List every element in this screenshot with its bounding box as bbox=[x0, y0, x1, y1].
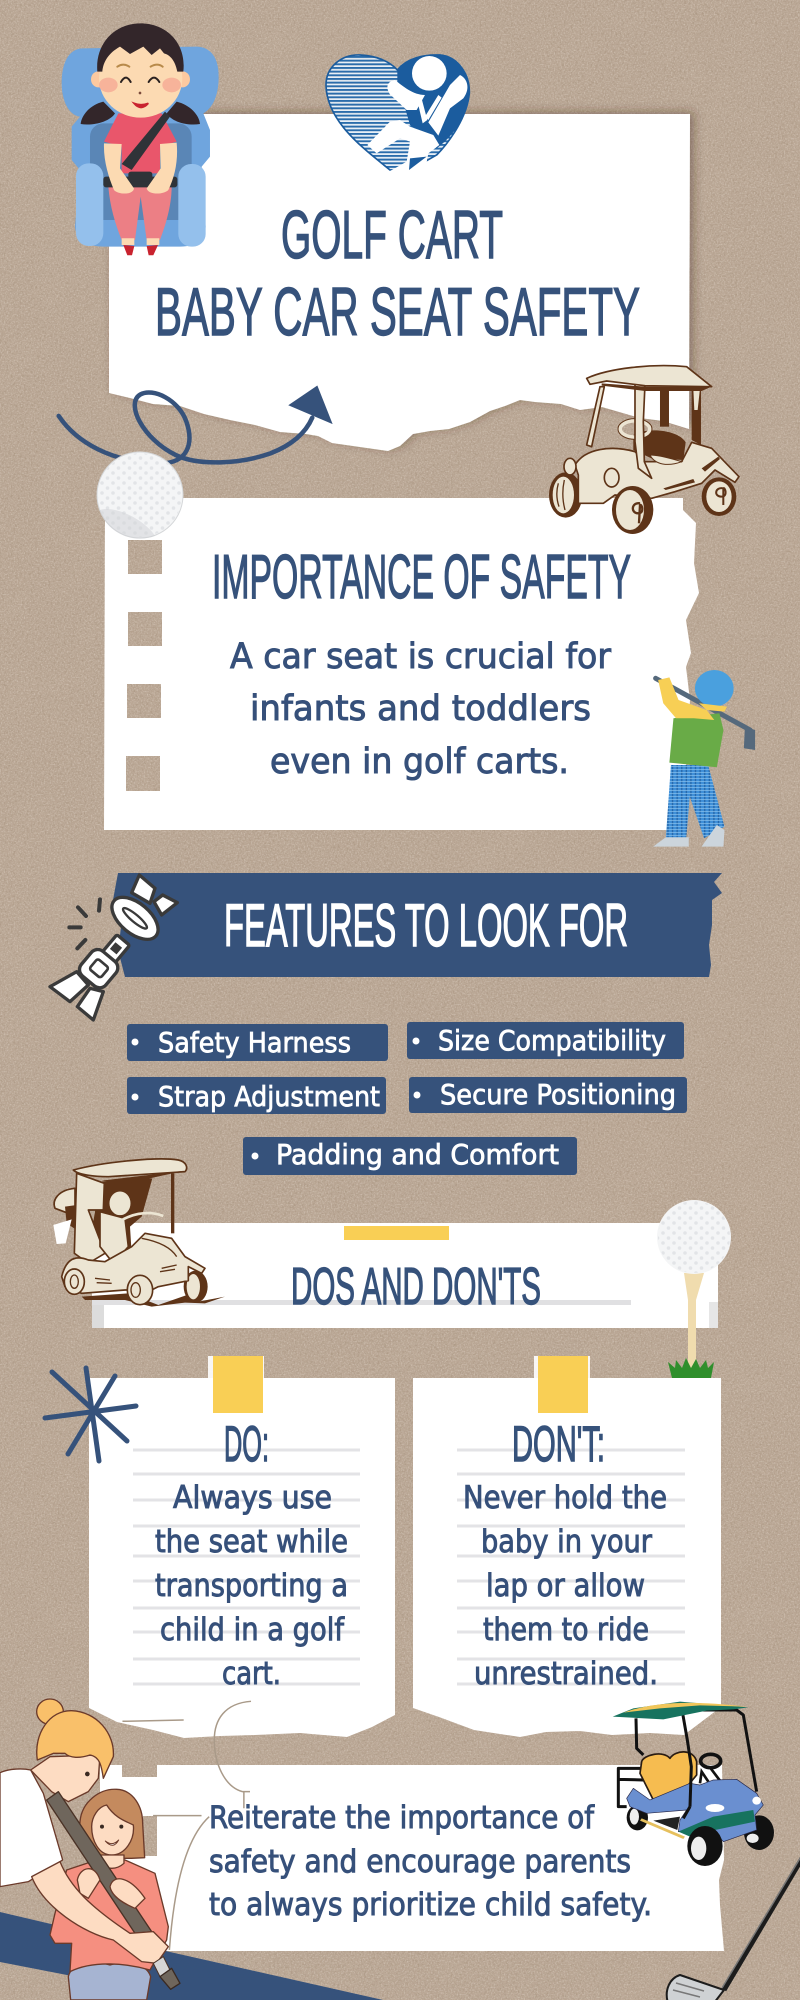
buckle bbox=[153, 1957, 170, 1977]
roof bbox=[613, 1702, 748, 1719]
white bow bbox=[53, 1219, 72, 1244]
arms bbox=[658, 677, 714, 720]
tape bbox=[534, 1356, 590, 1414]
panel: do note: child in a golf bbox=[160, 1612, 345, 1648]
panel: do note: cart. bbox=[222, 1656, 281, 1692]
panel: do note: the seat while bbox=[155, 1524, 348, 1560]
panel: dos and don'ts header paper bbox=[92, 1223, 718, 1328]
rear bag bbox=[54, 1188, 75, 1213]
text block: closing message: Reiterate the importance of bbox=[209, 1800, 595, 1836]
grass bbox=[668, 1358, 714, 1378]
icon: blue golf cart bbox=[613, 1702, 774, 1866]
heading: don't: DON'T: bbox=[512, 1416, 605, 1472]
head bbox=[91, 71, 106, 87]
ball bbox=[657, 1200, 731, 1274]
icon: vintage golf cart bbox=[549, 366, 739, 534]
panel: importance of safety paper bbox=[104, 498, 699, 830]
hair bbox=[97, 23, 184, 72]
title line 1: GOLF CART bbox=[281, 197, 503, 273]
icon: vintage cart with child bbox=[53, 1159, 225, 1307]
rear rack bbox=[618, 1768, 643, 1807]
chip: size compatibility: Size Compatibility bbox=[438, 1024, 666, 1057]
bun bbox=[37, 1699, 63, 1724]
ruled lines bbox=[457, 1450, 685, 1684]
green stripe bbox=[678, 1810, 755, 1837]
icon: looped arrow bbox=[59, 386, 333, 463]
steering wheel bbox=[701, 1754, 721, 1768]
icon: golf club bbox=[667, 1855, 800, 2000]
child neck bbox=[101, 1855, 124, 1868]
tee bbox=[684, 1273, 704, 1368]
rear post bbox=[171, 1173, 174, 1233]
text: do body: Always use bbox=[173, 1480, 332, 1516]
panel: don't note bbox=[413, 1356, 721, 1737]
child hands bbox=[77, 1869, 145, 1908]
roof bbox=[602, 383, 712, 391]
heading: dos and don'ts: DOS AND DON'TS bbox=[291, 1258, 541, 1316]
navy ground shape bbox=[0, 1912, 383, 2000]
front wheel bbox=[687, 1826, 723, 1866]
icon: seatbelt heart bbox=[326, 55, 469, 171]
cap bbox=[695, 670, 734, 707]
under dark bbox=[653, 1817, 680, 1830]
text block: importance body: even in golf carts. bbox=[270, 742, 569, 782]
club bbox=[656, 678, 750, 730]
woman shirt bbox=[0, 1769, 63, 1887]
illustration: parent buckling child bbox=[0, 1699, 180, 2000]
left post bbox=[587, 387, 604, 447]
chip: strap adjustment: Strap Adjustment bbox=[158, 1080, 380, 1113]
woman hair bbox=[37, 1711, 113, 1778]
icon: golfer bbox=[653, 670, 755, 847]
face bbox=[121, 78, 159, 82]
wheels bbox=[64, 1269, 84, 1294]
child face bbox=[92, 1805, 134, 1855]
icon: asterisk doodle bbox=[45, 1368, 136, 1461]
shirt bbox=[669, 713, 723, 767]
icon: seatbelt buckle bbox=[50, 875, 177, 1020]
rear posts bbox=[660, 388, 669, 427]
body bbox=[62, 1233, 205, 1293]
centre post bbox=[635, 384, 652, 478]
text block: importance body bbox=[230, 637, 612, 782]
text block: closing message: to always prioritize child safety. bbox=[209, 1887, 652, 1923]
woman arm bbox=[32, 1862, 168, 1963]
belt lap bbox=[103, 177, 177, 187]
panel: don't note: baby in your bbox=[481, 1524, 652, 1560]
pillar bbox=[74, 1173, 105, 1263]
chip: padding and comfort: Padding and Comfort bbox=[276, 1138, 559, 1171]
text block: closing message: safety and encourage parents bbox=[209, 1844, 631, 1880]
child hair bbox=[80, 1789, 145, 1858]
seat bbox=[633, 430, 686, 460]
body bbox=[627, 1779, 763, 1842]
frame bbox=[683, 1710, 757, 1818]
arms bbox=[104, 143, 177, 194]
roof bbox=[73, 1159, 187, 1177]
heading: do: DO: bbox=[224, 1416, 269, 1472]
woman face bbox=[31, 1755, 100, 1802]
panel: don't note: them to ride bbox=[483, 1612, 649, 1648]
tape bbox=[344, 1226, 449, 1240]
left wheel bbox=[549, 472, 582, 518]
rail bbox=[640, 1818, 685, 1839]
cabin bbox=[88, 1178, 152, 1253]
thin curved sketch lines bbox=[122, 1701, 251, 1950]
right wheel bbox=[702, 477, 736, 516]
rear wheel and shadow bbox=[82, 1293, 225, 1307]
chip: secure positioning: Secure Positioning bbox=[440, 1078, 676, 1111]
text block: importance body: infants and toddlers bbox=[250, 689, 591, 729]
icon: golf ball bbox=[97, 452, 183, 539]
banner: features to look for bbox=[113, 873, 722, 977]
seat bbox=[640, 1752, 697, 1800]
text block: importance body: A car seat is crucial for bbox=[230, 637, 612, 677]
panel: do note bbox=[89, 1356, 395, 1738]
legs bbox=[108, 187, 172, 240]
body bbox=[575, 442, 739, 503]
chip: safety harness: Safety Harness bbox=[158, 1026, 351, 1059]
shoes bbox=[653, 825, 724, 847]
title bbox=[155, 197, 640, 350]
panel: do note: transporting a bbox=[155, 1568, 348, 1604]
text block: closing message bbox=[209, 1800, 652, 1923]
panel: don't note: lap or allow bbox=[486, 1568, 645, 1604]
lights bbox=[706, 1804, 724, 1812]
headlights bbox=[564, 458, 576, 475]
shoulder belt bbox=[122, 112, 170, 170]
rear posts bbox=[636, 1718, 643, 1755]
panel: title paper bbox=[109, 114, 690, 451]
panel: closing paper bbox=[100, 1765, 724, 1951]
belt bbox=[47, 1792, 152, 1933]
pigtails bbox=[81, 102, 200, 124]
child legs bbox=[68, 1962, 151, 2000]
wheels rear bbox=[744, 1815, 774, 1850]
icon: child in car seat bbox=[62, 23, 219, 255]
text: don't body: Never hold the bbox=[463, 1480, 667, 1516]
legs bbox=[666, 765, 724, 838]
child torso bbox=[50, 1860, 168, 1972]
child bbox=[100, 1212, 128, 1263]
icon: golf ball on tee bbox=[657, 1200, 731, 1378]
shirt bbox=[104, 113, 177, 173]
tape bbox=[208, 1356, 264, 1414]
panel: don't note: unrestrained. bbox=[474, 1656, 658, 1692]
ruled lines bbox=[133, 1450, 360, 1684]
front wheel bbox=[612, 486, 653, 534]
